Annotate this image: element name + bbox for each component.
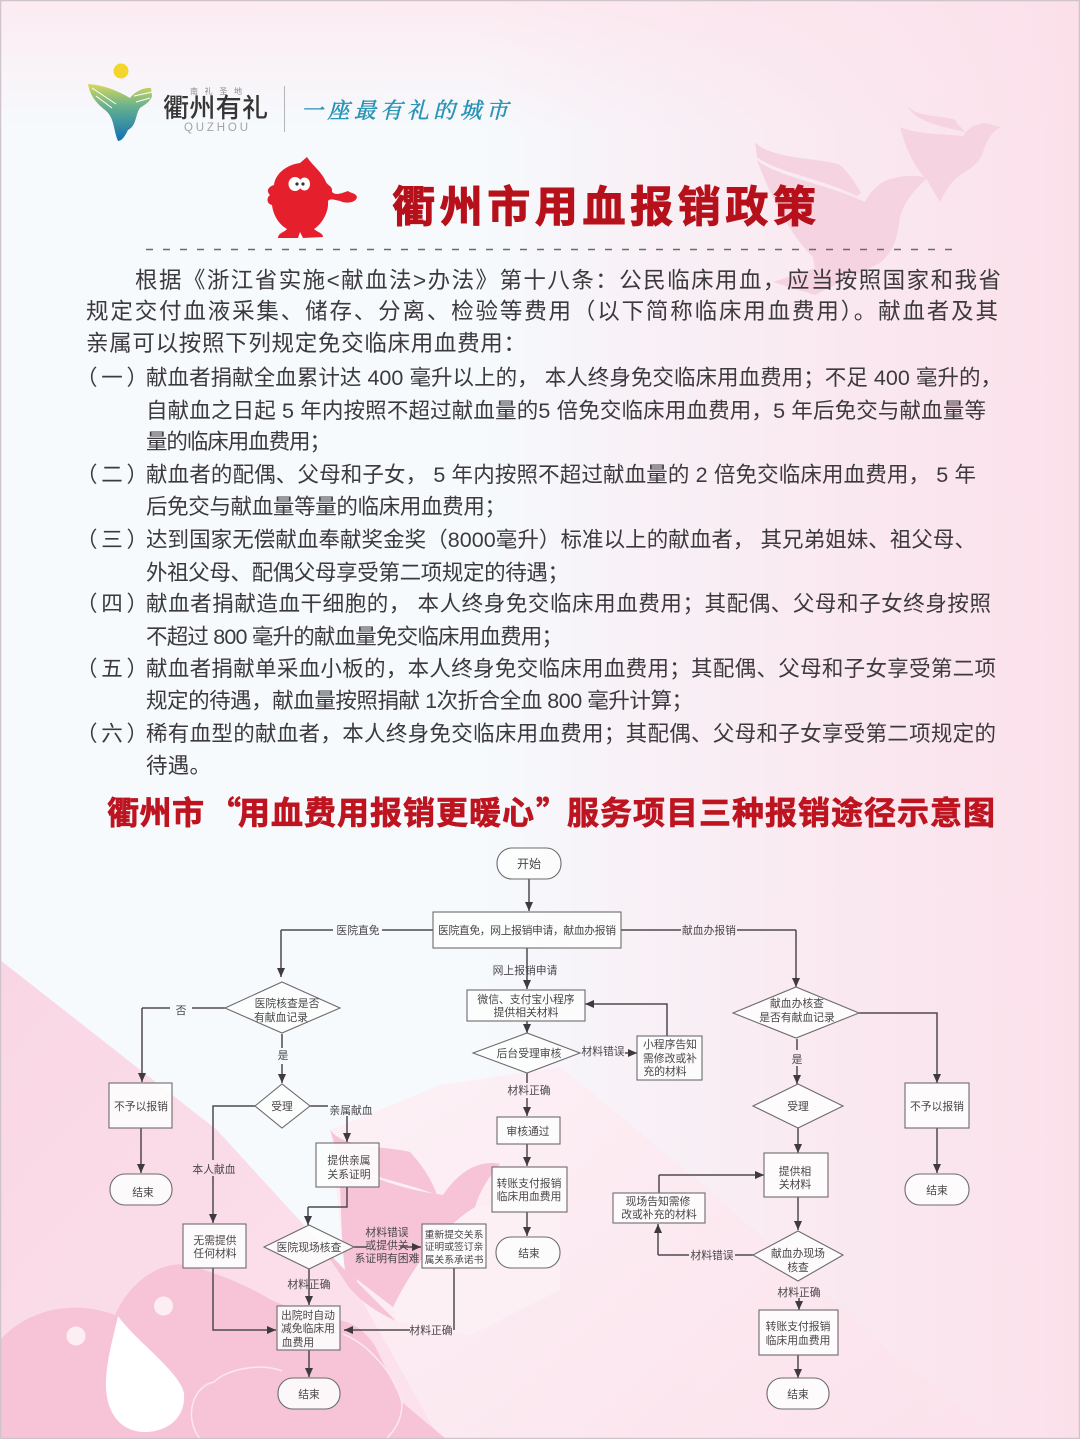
- end node: 结束: [132, 1186, 154, 1199]
- flowchart heading: 衢州市: [107, 788, 204, 834]
- box: automatic waiver: 血费用: [282, 1335, 314, 1349]
- box: automatic waiver: 出院时自动: [281, 1308, 335, 1322]
- clause 4: 献血者捐献造血干细胞的， 本人终身免交临床用血费用；其配偶、父母和子女终身按照: [146, 592, 991, 616]
- decision: back-office review: [473, 1033, 580, 1073]
- box: approved: 审核通过: [506, 1124, 550, 1138]
- clause 5: [76, 657, 996, 713]
- box: relative proof: 关系证明: [327, 1167, 371, 1181]
- box: transfer payment: [759, 1310, 838, 1355]
- end node: 结束: [518, 1247, 540, 1260]
- logo latin name: QUZHOU: [184, 122, 248, 134]
- clause 3: （三）: [76, 528, 148, 552]
- box: resubmit: 属关系承诺书: [425, 1253, 484, 1266]
- logo small caption: 南礼圣地: [190, 86, 242, 96]
- decision: on-site check: 医院现场核查: [277, 1240, 342, 1254]
- decision: accept: [753, 1084, 843, 1128]
- clause 1: [76, 366, 1002, 454]
- box: relative proof: [316, 1143, 379, 1187]
- clause 1: 献血者捐献全血累计达 400 毫升以上的， 本人终身免交临床用血费用；不足 400 毫升的，: [146, 366, 1002, 390]
- box: no reimbursement: 不予以报销: [114, 1099, 168, 1113]
- branch labels: 材料错误: [581, 1044, 625, 1058]
- box: no reimbursement: [109, 1083, 172, 1128]
- branch labels: 材料错误: [690, 1248, 734, 1262]
- clause 1: （一）: [76, 366, 148, 390]
- end node: 结束: [787, 1388, 809, 1401]
- box: resubmit: 重新提交关系: [425, 1228, 484, 1241]
- end node: [767, 1378, 829, 1409]
- box: no reimbursement: [905, 1083, 969, 1128]
- decision: office on-site check: [753, 1231, 843, 1281]
- box: automatic waiver: 减免临床用: [281, 1321, 335, 1335]
- decision: accept: [255, 1084, 310, 1128]
- clause 3: [76, 528, 976, 585]
- box: resubmit: 证明或签订亲: [425, 1240, 484, 1253]
- start node: 开始: [517, 857, 541, 871]
- clause 6: （六）: [76, 722, 148, 746]
- intro paragraph: 亲属可以按照下列规定免交临床用血费用：: [86, 331, 526, 356]
- branch labels: 本人献血: [192, 1162, 236, 1176]
- decision: hospital record check: [225, 982, 340, 1033]
- box: notify correction: 小程序告知: [643, 1037, 697, 1051]
- decision: office on-site check: 核查: [787, 1260, 809, 1274]
- branch labels: 网上报销申请: [493, 963, 558, 977]
- decision: hospital record check: 有献血记录: [254, 1010, 308, 1024]
- flowchart heading: [107, 788, 995, 834]
- route 3: blood donation office: [613, 987, 969, 1409]
- branch labels: 医院直免: [336, 923, 380, 937]
- box: transfer payment: 转账支付报销: [766, 1319, 831, 1333]
- clause 6: [76, 722, 996, 778]
- branch labels: 亲属献血: [329, 1103, 373, 1117]
- box: notify correction: 需修改或补: [643, 1051, 697, 1065]
- box: notify on site: 现场告知需修: [626, 1194, 691, 1208]
- decision: hospital record check: 医院核查是否: [255, 996, 320, 1010]
- box: notify correction: [637, 1036, 702, 1080]
- title: 衢州市用血报销政策: [392, 184, 816, 232]
- box: no reimbursement: 不予以报销: [910, 1099, 964, 1113]
- branch labels: 是: [278, 1049, 289, 1062]
- clause 2: （二）: [76, 463, 148, 487]
- branch labels: 材料错误: [365, 1225, 409, 1239]
- decision: on-site check: [264, 1225, 354, 1269]
- decision: office record check: 是否有献血记录: [759, 1010, 835, 1024]
- branch labels: 材料正确: [507, 1083, 551, 1097]
- flowchart heading: 用血费用报销更暖心: [238, 788, 534, 834]
- flowchart: [109, 848, 969, 1409]
- branch labels: 献血办报销: [682, 923, 736, 937]
- box: no material: 无需提供: [193, 1233, 237, 1247]
- clause 2: 献血者的配偶、父母和子女， 5 年内按照不超过献血量的 2 倍免交临床用血费用， 5 年: [146, 463, 976, 487]
- decision: back-office review: 后台受理审核: [497, 1046, 562, 1060]
- start node: [497, 848, 561, 879]
- dove: top right background: [755, 105, 1001, 295]
- box: no material: 任何材料: [193, 1246, 237, 1260]
- box: provide materials: 关材料: [779, 1177, 811, 1191]
- box: transfer payment: 临床用血费用: [766, 1333, 830, 1347]
- branch labels: 系证明有困难: [355, 1251, 420, 1265]
- box: provide materials: [764, 1153, 828, 1197]
- box: relative proof: 提供亲属: [327, 1153, 371, 1167]
- clause 4: 不超过 800 毫升的献血量免交临床用血费用；: [146, 625, 563, 649]
- decision: accept: 受理: [787, 1100, 809, 1113]
- end node: 结束: [926, 1184, 948, 1197]
- box: transfer payment: 临床用血费用: [497, 1189, 561, 1203]
- box: automatic waiver: [277, 1306, 340, 1350]
- flowchart heading: “: [209, 788, 241, 834]
- box: mini program: 提供相关材料: [494, 1005, 559, 1019]
- box: resubmit: [422, 1224, 486, 1268]
- branch labels: 材料正确: [409, 1323, 453, 1337]
- route 1: hospital waiver: [109, 982, 486, 1409]
- end node: [905, 1174, 969, 1205]
- end node: [496, 1237, 560, 1268]
- connector lines: [141, 878, 937, 1378]
- intro paragraph: 根据《浙江省实施<献血法>办法》第十八条：公民临床用血，应当按照国家和我省: [135, 268, 1001, 293]
- clause 5: （五）: [76, 657, 148, 681]
- decision: three routes: 医院直免，网上报销申请，献血办报销: [438, 923, 616, 937]
- end node: [110, 1174, 172, 1205]
- flowchart heading: ”: [536, 788, 568, 834]
- box: notify on site: 改或补充的材料: [621, 1207, 697, 1221]
- box: provide materials: 提供相: [779, 1164, 811, 1178]
- box: transfer payment: 转账支付报销: [497, 1176, 562, 1190]
- logo: Quzhou: [88, 64, 511, 141]
- clause 1: 自献血之日起 5 年内按照不超过献血量的5 倍免交临床用血费用，5 年后免交与献血量等: [146, 399, 986, 423]
- icon: sun and hands: [88, 64, 152, 141]
- clause 6: 待遇。: [146, 754, 211, 778]
- branch labels: 否: [176, 1005, 187, 1017]
- clause 5: 规定的待遇，献血量按照捐献 1次折合全血 800 毫升计算；: [146, 689, 693, 713]
- clause 1: 量的临床用血费用；: [146, 430, 331, 454]
- box: transfer payment: [492, 1167, 567, 1212]
- mascot: blood drop: [268, 157, 357, 238]
- slogan: 一座最有礼的城市: [301, 94, 511, 125]
- route 2: online: [467, 990, 702, 1268]
- end node: [278, 1378, 340, 1409]
- decision: office record check: [733, 987, 859, 1038]
- box: no material: [183, 1224, 246, 1268]
- box: notify correction: 充的材料: [643, 1064, 687, 1078]
- decision: three routes: [433, 912, 621, 948]
- intro paragraph: 规定交付血液采集、储存、分离、检验等费用（以下简称临床用血费用）。献血者及其: [86, 299, 998, 324]
- branch labels: 或提供关: [365, 1238, 409, 1252]
- branch labels: 材料正确: [287, 1277, 331, 1291]
- policy text block: [76, 268, 1002, 778]
- decision: office on-site check: 献血办现场: [771, 1246, 825, 1260]
- decision: accept: 受理: [271, 1100, 293, 1113]
- clause 5: 献血者捐献单采血小板的，本人终身免交临床用血费用；其配偶、父母和子女享受第二项: [146, 657, 996, 681]
- clause 2: [76, 463, 976, 519]
- decision: office record check: 献血办核查: [770, 996, 824, 1010]
- clause 3: 外祖父母、配偶父母享受第二项规定的待遇；: [146, 561, 569, 585]
- logo wordmark: 衢州有礼: [163, 93, 268, 123]
- flowchart heading: 服务项目三种报销途径示意图: [567, 788, 995, 834]
- clause 4: （四）: [76, 592, 148, 616]
- clause 2: 后免交与献血量等量的临床用血费用；: [146, 495, 506, 519]
- intro paragraph: [86, 268, 1001, 356]
- box: notify on site: [613, 1193, 705, 1223]
- box: mini program: [467, 990, 585, 1021]
- branch labels: 材料正确: [777, 1285, 821, 1299]
- branch labels: 是: [792, 1053, 803, 1066]
- clause 6: 稀有血型的献血者，本人终身免交临床用血费用；其配偶、父母和子女享受第二项规定的: [146, 722, 996, 746]
- clause 4: [76, 592, 991, 649]
- box: mini program: 微信、支付宝小程序: [477, 992, 575, 1006]
- birds: lower left background: [0, 1129, 560, 1439]
- end node: 结束: [298, 1388, 320, 1401]
- box: approved: [497, 1117, 560, 1144]
- branch labels: [176, 923, 821, 1337]
- clause 3: 达到国家无偿献血奉献奖金奖（8000毫升）标准以上的献血者， 其兄弟姐妹、祖父母、: [146, 528, 976, 552]
